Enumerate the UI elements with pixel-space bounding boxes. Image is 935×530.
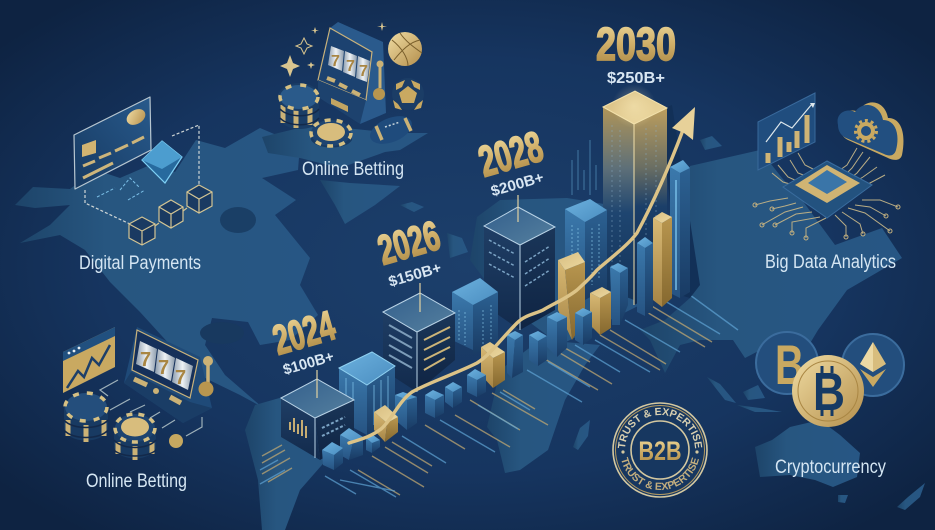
icon: football xyxy=(366,111,416,149)
icon: slot machine: 7 xyxy=(331,53,340,70)
year label: 2026: 2026 xyxy=(372,211,445,274)
arrow: growth trend xyxy=(349,107,695,443)
panel: digital payments xyxy=(74,97,212,274)
icon: crystal xyxy=(97,141,182,200)
bar chart: isometric growth towers xyxy=(281,84,700,470)
year label: 2030: $250B+ xyxy=(607,70,665,87)
badge: B2B trust and expertise seal: TRUST & EXPERTISE xyxy=(618,408,702,448)
year label: 2028: 2028 xyxy=(474,123,548,187)
badge: B2B trust and expertise seal: B2B xyxy=(638,436,682,466)
icon: chart panel xyxy=(758,93,815,170)
icon: slot machine: 7 xyxy=(140,349,151,371)
icon: soccer ball xyxy=(392,78,424,110)
tower: 2024 cube xyxy=(281,370,354,460)
streak lines xyxy=(260,295,738,497)
icon: slot machine xyxy=(124,327,214,423)
panel: big data analytics xyxy=(753,93,903,273)
icon: credit card xyxy=(74,97,151,189)
tower: 2026 blue xyxy=(452,278,498,355)
label: Digital Payments: Digital Payments xyxy=(79,253,201,274)
panel: online betting top xyxy=(279,22,424,180)
badge: B2B trust and expertise seal xyxy=(612,402,708,498)
icon: slot machine: 7 xyxy=(359,63,368,80)
world map xyxy=(15,127,925,530)
icon: slot machine: 7 xyxy=(175,367,186,389)
tower: 2030 tall xyxy=(603,84,700,305)
panel: online betting bottom xyxy=(63,327,214,492)
year label: 2030: 2030 xyxy=(596,18,676,70)
icon: bitcoin coin gold: B xyxy=(813,362,845,422)
label: Online Betting top: Online Betting xyxy=(302,159,404,180)
label: Big Data Analytics: Big Data Analytics xyxy=(765,252,896,273)
icon: blockchain cubes xyxy=(85,125,212,245)
tower: 2028 cube xyxy=(484,195,555,330)
icon: browser chart xyxy=(63,327,115,393)
icon: basketball xyxy=(388,32,422,66)
badge: B2B trust and expertise seal: TRUST & EXPERTISE xyxy=(622,456,699,490)
year label: 2024: $100B+ xyxy=(281,348,336,379)
label: Cryptocurrency: Cryptocurrency xyxy=(775,457,886,478)
sparkle stars xyxy=(280,22,387,77)
icon: bitcoin coin gold xyxy=(792,355,864,427)
tower: 2026 cube xyxy=(383,283,455,392)
rising small bars xyxy=(322,252,628,470)
icon: processor chip xyxy=(753,148,900,240)
icon: poker chips xyxy=(64,380,202,460)
year label: 2026: $150B+ xyxy=(387,259,444,291)
bars behind 2030 xyxy=(637,160,690,316)
icon: slot machine: 7 xyxy=(346,58,355,75)
label: Online Betting bottom: Online Betting xyxy=(86,471,187,492)
year label: 2028: $200B+ xyxy=(489,169,546,200)
tower: 2024 blue xyxy=(339,352,395,438)
panel: cryptocurrency xyxy=(756,332,904,478)
icon: poker chips xyxy=(279,84,352,148)
tower: 2028 blue xyxy=(565,140,607,300)
icon: cloud with gear xyxy=(838,102,903,160)
icon: slot machine: 7 xyxy=(158,357,169,379)
icon: slot machine xyxy=(318,22,386,124)
icon: ethereum coin xyxy=(842,334,904,396)
year label: 2024: 2024 xyxy=(267,301,340,364)
icon: bitcoin coin blue: B xyxy=(775,333,804,396)
icon: bitcoin coin blue xyxy=(756,332,818,396)
